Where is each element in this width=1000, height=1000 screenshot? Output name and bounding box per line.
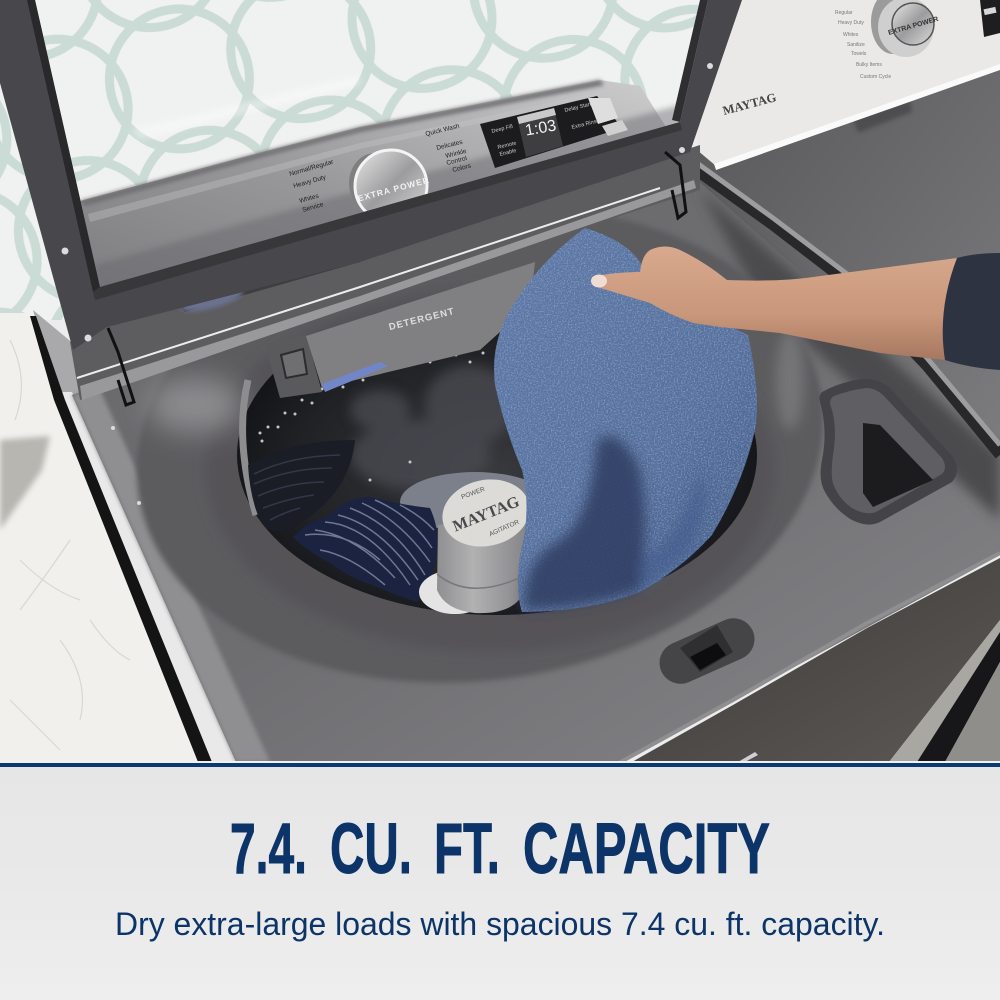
product photo: washer and dryer scene [0, 0, 1000, 764]
cycle labels left: Normal/Regular [289, 158, 335, 178]
dryer cycle labels: Towels [851, 51, 867, 57]
washer lid frame [0, 0, 742, 350]
handle slot [690, 643, 726, 670]
agitator cylinder [436, 480, 526, 614]
white hairline [0, 761, 1000, 763]
dark stand at lower right [917, 632, 1000, 762]
blue towel [494, 228, 757, 612]
detergent drawer: DETERGENT [388, 306, 456, 333]
dryer brand: MAYTAG [721, 90, 778, 118]
agitator base plate [400, 472, 526, 528]
wallpaper behind washer [0, 100, 64, 320]
towel shadow folds [524, 436, 706, 610]
dryer cycle labels [835, 10, 891, 80]
dryer cycle labels: Whites [843, 32, 859, 38]
screws on deck [111, 426, 141, 505]
washer front cabinet [632, 558, 1000, 762]
dryer cycle labels: Sanitize [847, 42, 865, 48]
agitator labels: MAYTAG [450, 493, 522, 535]
left hinge wire [108, 328, 134, 405]
arm and hand [591, 246, 1000, 370]
striped blue garment [293, 497, 438, 602]
washer display panel: 1:03 [524, 117, 558, 140]
washer dial: EXTRA POWER [357, 175, 431, 203]
heading: CAPACITY [523, 810, 770, 889]
dryer vent patch [853, 100, 912, 133]
dryer cycle labels: Custom Cycle [860, 74, 891, 80]
washer display panel [480, 96, 628, 168]
lid screws [62, 63, 713, 342]
right side trim of washer [685, 158, 1000, 455]
cycle labels right: Quick Wash [425, 123, 461, 138]
right hinge wire [665, 152, 686, 218]
agitator cylinder: AGITATOR [488, 519, 521, 538]
dryer display panel [980, 0, 1000, 37]
lid glass with wallpaper reflection [80, 0, 699, 287]
dryer cycle labels: Regular [835, 10, 853, 16]
washer display panel: Deep Fill [491, 124, 514, 135]
heading: 7.4. [230, 810, 307, 889]
panel background [0, 767, 1000, 1000]
washer display panel: Delay Start [564, 101, 592, 114]
drum perforation dots [258, 352, 484, 482]
dark sleeve [943, 253, 1000, 370]
cycle labels right: Control [446, 155, 468, 167]
lid hinge rod [70, 145, 700, 400]
cycle labels left: Service [302, 201, 325, 214]
dryer control console [697, 0, 1000, 170]
caption panel [0, 761, 1000, 1000]
cycle labels left: Heavy Duty [293, 174, 328, 190]
detergent drawer [265, 262, 535, 398]
tub recess shading [134, 218, 824, 684]
chrome latch [738, 752, 758, 762]
agitator base disc [419, 572, 470, 614]
subheading: Dry extra-large loads with spacious 7.4 cu. ft. capacity. [115, 906, 885, 942]
floor wedge [889, 620, 1000, 762]
washer silver base corner [33, 310, 79, 394]
agitator cylinder: POWER [460, 486, 486, 501]
black washer edge line [30, 316, 212, 762]
drawer window [281, 349, 307, 378]
cycle labels left [289, 160, 333, 212]
glass light streak [130, 75, 360, 140]
drum reflections [350, 365, 515, 490]
lower front ridge highlight [617, 553, 1000, 764]
white trim along washer edge [58, 392, 240, 762]
dryer dial: EXTRA POWER [888, 16, 939, 37]
dispenser dark opening [863, 423, 933, 507]
cycle labels right: Delicates [436, 138, 464, 152]
washer display panel: Enable [499, 148, 517, 158]
cycle labels right [426, 124, 471, 172]
dark gap below lid with reflection [181, 262, 360, 312]
dryer dial [871, 0, 939, 57]
dark band near right edge [700, 190, 1000, 520]
dryer top surface [700, 70, 1000, 446]
dark garment at back [248, 440, 355, 531]
washer tub opening [237, 295, 757, 615]
washer display panel: Extra Rinse [571, 118, 600, 131]
washer top deck [72, 178, 1000, 762]
washer dial [349, 148, 429, 212]
dryer cycle labels: Heavy Duty [838, 20, 864, 26]
marble countertop [0, 313, 130, 750]
lighter strip at left of deck [72, 390, 270, 762]
floor at lower right [945, 662, 1000, 762]
door handle recess [653, 611, 761, 691]
dryer cycle labels: Bulky Items [856, 62, 882, 68]
cycle labels right: Wrinkle [445, 148, 468, 160]
navy rule [0, 763, 1000, 767]
cycle labels left: Whites [299, 193, 320, 205]
fabric softener dispenser [819, 379, 957, 525]
heading: FT. [434, 810, 500, 889]
reflected washer control console [80, 80, 680, 300]
washer display panel: Remote [497, 140, 517, 151]
heading: CU. [330, 810, 412, 889]
fingernail [591, 274, 607, 288]
cycle labels right: Colors [452, 162, 472, 174]
